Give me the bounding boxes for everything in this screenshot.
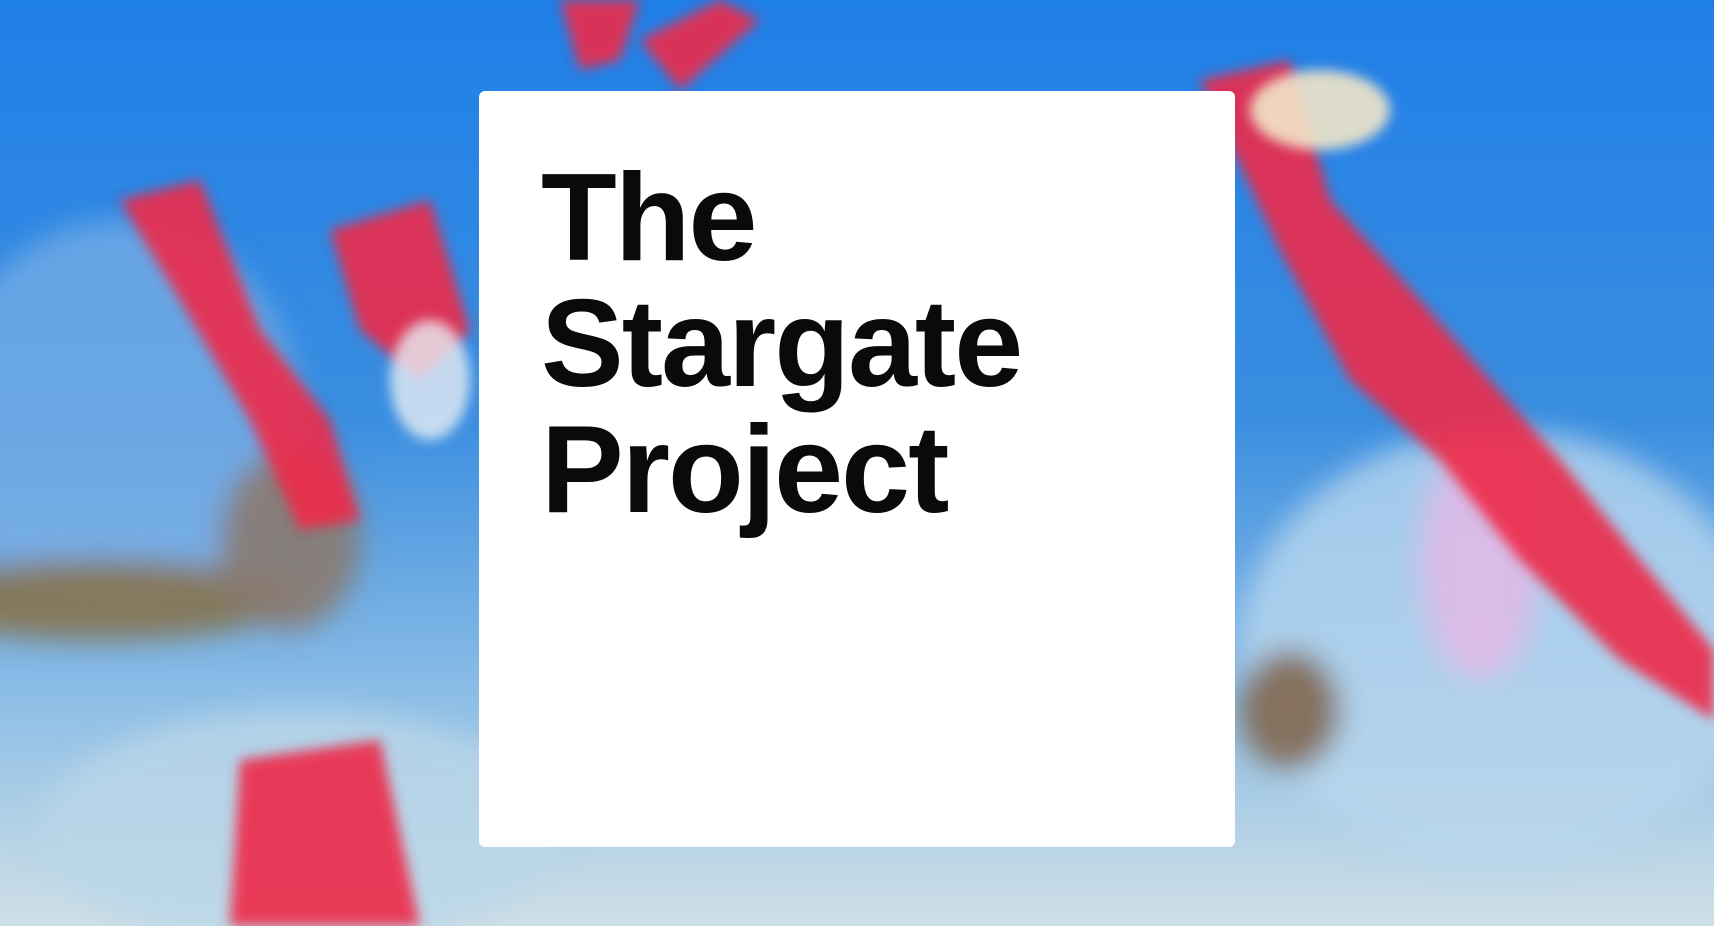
title: Project [541, 401, 947, 539]
title [541, 149, 1021, 539]
title: Stargate [541, 275, 1021, 413]
title: The [541, 149, 755, 287]
white card [479, 91, 1235, 847]
